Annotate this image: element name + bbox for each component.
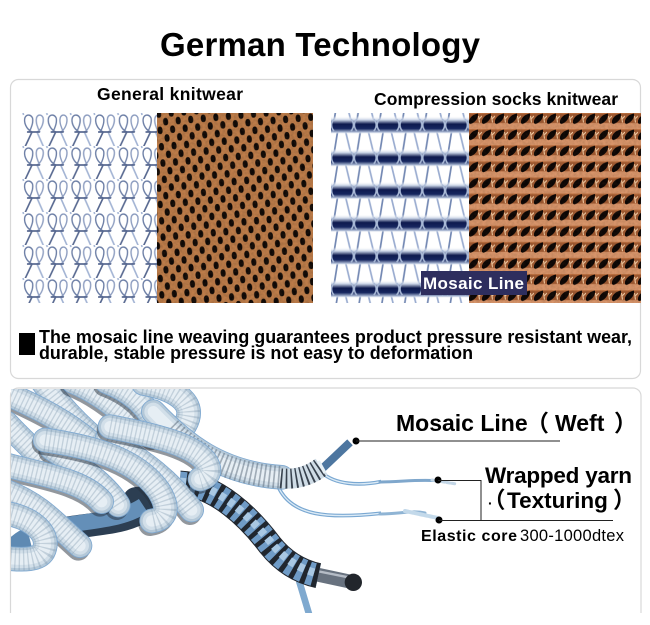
label: elastic core dtex: 300-1000dtex: [520, 527, 625, 545]
label: wrapped yarn texturing: ·: [488, 495, 493, 511]
photo: compression knit fabric: [469, 113, 641, 303]
label: wrapped yarn texturing: ）: [613, 488, 636, 513]
text block: mosaic line description: durable, stable pressure is not easy to deformation: [39, 343, 473, 363]
illustration: interlaced yarn: [5, 378, 381, 615]
main upper strand: [153, 412, 325, 479]
leader line: mosaic line: [352, 438, 560, 444]
core tip of upper yarn: [318, 442, 350, 472]
frayed yarn ends: [380, 480, 456, 518]
heading: compression socks knitwear: Compression socks knitwear: [374, 89, 618, 109]
text block: mosaic line description: [39, 327, 632, 363]
photo: general knit fabric: [157, 113, 313, 303]
label: mosaic line weft: ）: [614, 410, 637, 436]
blue core strand: [8, 498, 146, 558]
label: elastic core dtex: Elastic core: [421, 528, 517, 545]
title: German Technology: [160, 26, 481, 63]
label: elastic core dtex: [421, 527, 625, 545]
lower dark wrapped strand: [180, 482, 318, 576]
thin wrapped yarn strands: [279, 472, 381, 615]
label: wrapped yarn texturing: Wrapped yarn: [485, 463, 632, 488]
diagram: general knit stitches: [22, 113, 157, 303]
label: wrapped yarn texturing: [483, 463, 636, 513]
label: wrapped yarn texturing: Texturing: [507, 488, 608, 513]
heading: general knitwear: General knitwear: [97, 84, 243, 104]
diagram: compression knit stitches with mosaic bars: [331, 113, 469, 303]
icon: black square bullet: [19, 333, 35, 355]
back white strands: [11, 389, 201, 464]
text block: mosaic line description: The mosaic line weaving guarantees product pressure resistant wear,: [39, 327, 632, 347]
callout: mosaic line: Mosaic Line: [423, 274, 524, 293]
label: mosaic line weft: Mosaic Line: [396, 410, 528, 436]
panel: knitwear comparison: [10, 80, 641, 378]
label: mosaic line weft: （: [526, 410, 549, 436]
leader lines: wrapped yarn and elastic core: [434, 476, 613, 524]
lower core tip: [317, 568, 362, 591]
label: wrapped yarn texturing: （: [483, 488, 506, 513]
label: mosaic line weft: Weft: [555, 410, 605, 436]
panel: yarn structure: [5, 378, 641, 615]
front white strands: [5, 427, 209, 559]
